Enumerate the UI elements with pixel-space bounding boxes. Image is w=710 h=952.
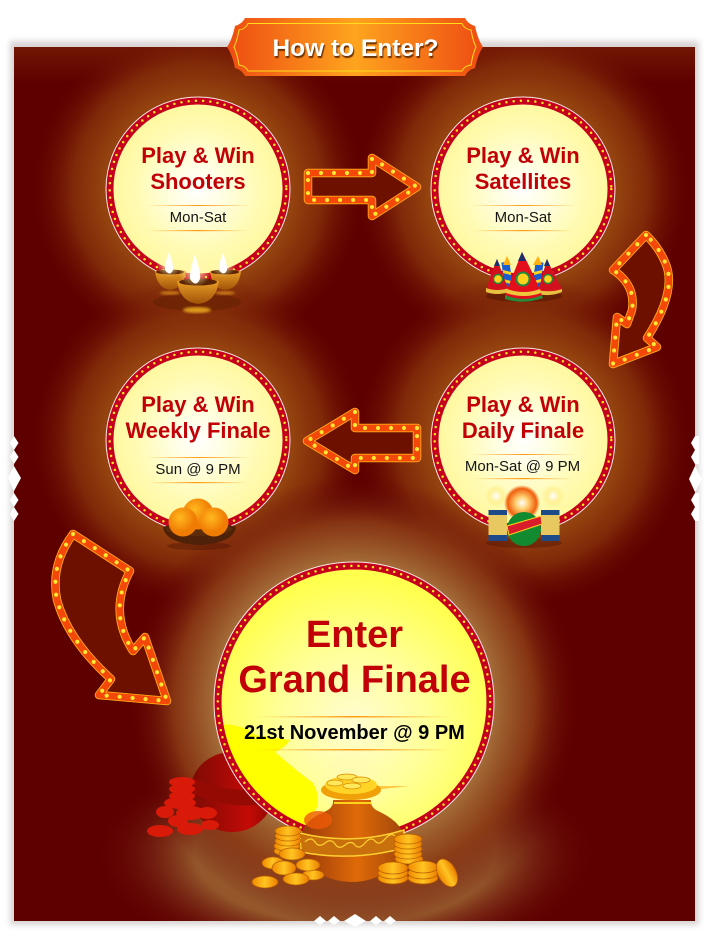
step 2 heading: Satellites bbox=[475, 169, 571, 194]
icon: flowerpot crackers bbox=[485, 485, 564, 548]
icon: laddu plate bbox=[163, 498, 236, 550]
grand finale heading: Grand Finale bbox=[238, 659, 471, 701]
left coin stack bbox=[252, 826, 324, 888]
step 1 heading: Play & Win bbox=[141, 143, 255, 168]
icon: firecracker cones bbox=[486, 252, 562, 302]
grand finale heading: Enter bbox=[306, 614, 403, 656]
right coin stacks bbox=[378, 834, 462, 890]
step 1 schedule: Mon-Sat bbox=[170, 209, 227, 226]
icon: diyas bbox=[153, 251, 241, 313]
step 4 heading: Play & Win bbox=[466, 392, 580, 417]
arrow: weekly finale to grand finale bbox=[55, 534, 167, 701]
step 4 heading: Daily Finale bbox=[462, 418, 584, 443]
panel: step 1 shooters bbox=[106, 97, 290, 281]
decorative notches: left bbox=[8, 436, 21, 521]
icon: red pot and red coins bbox=[147, 752, 274, 837]
panel: grand finale bbox=[214, 562, 494, 842]
step 3 heading: Weekly Finale bbox=[125, 418, 271, 443]
title text: How to Enter? bbox=[272, 35, 439, 62]
step 2 schedule: Mon-Sat bbox=[495, 209, 552, 226]
step 4 schedule: Mon-Sat @ 9 PM bbox=[465, 458, 580, 475]
panel: step 2 satellites bbox=[431, 97, 615, 281]
icon: gold pot and coins bbox=[252, 749, 462, 890]
step 1 heading: Shooters bbox=[150, 169, 246, 194]
step 2 heading: Play & Win bbox=[466, 143, 580, 168]
step 3 schedule: Sun @ 9 PM bbox=[155, 461, 241, 478]
arrow: satellites to daily finale bbox=[613, 235, 669, 364]
panel: step 4 daily finale bbox=[431, 348, 615, 532]
decorative notches: bottom bbox=[314, 914, 396, 927]
grand finale date: 21st November @ 9 PM bbox=[244, 722, 465, 744]
panel: step 3 weekly finale bbox=[106, 348, 290, 532]
step 3 heading: Play & Win bbox=[141, 392, 255, 417]
arrow: shooters to satellites bbox=[308, 158, 417, 216]
arrow: daily finale to weekly finale bbox=[307, 412, 417, 470]
title banner bbox=[227, 18, 483, 76]
decorative notches: right bbox=[689, 436, 702, 521]
